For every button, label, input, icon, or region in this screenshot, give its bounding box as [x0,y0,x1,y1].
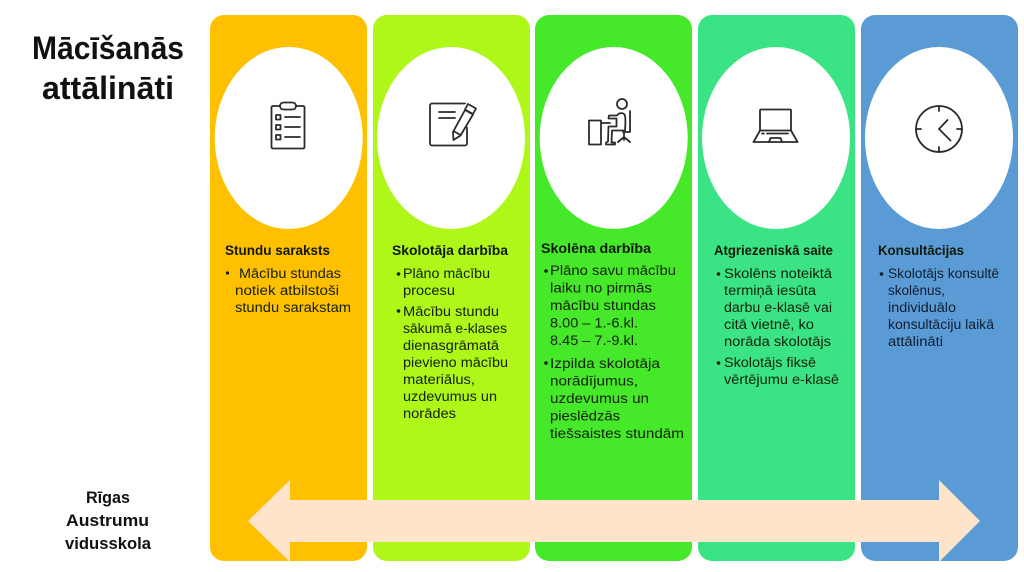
title: Mācīšanās [32,30,184,66]
text block: mācību stundas [550,298,656,314]
school name [65,488,152,553]
text block: konsultāciju laikā [888,317,994,333]
heading: Atgriezeniskā saite [714,243,833,258]
text block: notiek atbilstoši [235,283,339,299]
title: attālināti [42,70,174,106]
arrow: double-headed [248,480,980,562]
text block: Plāno mācību [403,266,490,282]
text block: norādījumus, [550,374,638,390]
text block: 8.00 – 1.-6.kl. [550,316,638,332]
icon circle: clock [865,47,1013,229]
heading: Skolēna darbība [541,241,652,256]
panel: Konsultācijas [861,15,1018,561]
text block: attālināti [888,334,943,350]
school name: Austrumu [66,511,149,530]
text block: termiņā iesūta [724,283,816,299]
school name: Rīgas [86,488,130,507]
school name: vidusskola [65,534,152,553]
text block: Izpilda skolotāja [550,356,660,372]
text block: norādes [403,406,456,422]
text block: sākumā e-klases [403,321,507,337]
panel: Stundu saraksts [210,15,367,561]
text block: Skolotājs konsultē [888,266,999,282]
text block: darbu e-klasē vai [724,300,832,316]
icon circle: clipboard [215,47,363,229]
text block: 8.45 – 7.-9.kl. [550,333,638,349]
text block: vērtējumu e-klasē [724,372,839,388]
text block: skolēnus, [888,283,945,299]
text block [717,266,839,388]
panel: Skolēna darbība [535,15,692,561]
title [32,30,184,106]
text block: pieslēdzās [550,408,620,424]
text block: uzdevumus un [550,391,649,407]
icon circle: notepad and pencil [377,47,525,229]
text block [397,266,508,422]
heading: Konsultācijas [878,243,964,258]
text block: citā vietnē, ko [724,317,814,333]
heading: Stundu saraksts [225,243,330,258]
text block: procesu [403,283,455,299]
text block: stundu sarakstam [235,300,351,316]
text block: individuālo [888,300,956,316]
heading: Skolotāja darbība [392,243,509,258]
text block: Mācību stundu [403,304,499,320]
icon circle: laptop [702,47,850,229]
text block: pievieno mācību [403,355,508,371]
text block: Skolotājs fiksē [724,355,816,371]
panel: Atgriezeniskā saite [698,15,855,561]
text block: tiešsaistes stundām [550,426,684,442]
text block: laiku no pirmās [550,280,652,296]
text block [880,266,999,350]
text block: dienasgrāmatā [403,338,499,354]
text block [544,263,684,442]
text block: materiālus, [403,372,475,388]
icon circle: student at desk [540,47,688,229]
text block: Skolēns noteiktā [724,266,832,282]
text block: Plāno savu mācību [550,263,676,279]
panel: Skolotāja darbība [373,15,530,561]
text block [226,266,351,316]
text block: norāda skolotājs [724,334,831,350]
text block: uzdevumus un [403,389,497,405]
text block: Mācību stundas [239,266,341,282]
